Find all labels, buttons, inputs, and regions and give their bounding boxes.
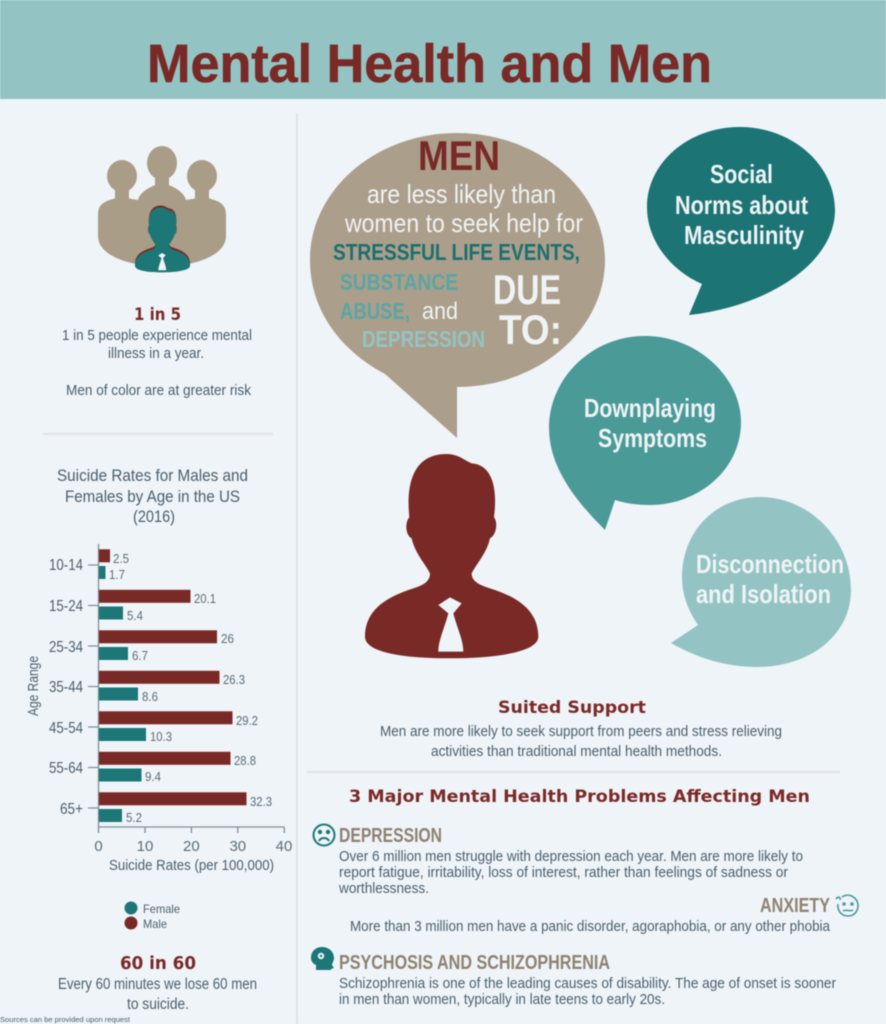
male bars: [99, 549, 246, 805]
value labels: 9.4: [145, 770, 161, 784]
text block: suited support description: activities than traditional mental health methods.: [431, 743, 722, 760]
icon: sad face: [314, 824, 334, 846]
speech bubble: social norms about masculinity: [647, 127, 835, 315]
text block: 1 in 5 description: Men of color are at greater risk: [66, 382, 251, 399]
value labels: 6.7: [132, 649, 148, 663]
value labels: 26.3: [223, 673, 245, 687]
age labels: [49, 557, 83, 818]
speech bubble: social norms about masculinity: Masculinity: [684, 220, 804, 250]
icon: anxious face: [836, 895, 858, 916]
text block: 60 in 60 description: Every 60 minutes we lose 60 men: [58, 976, 257, 993]
speech bubble: disconnection and isolation: [671, 497, 851, 667]
age labels: 45-54: [49, 720, 83, 737]
heading: psychosis and schizophrenia: PSYCHOSIS AND SCHIZOPHRENIA: [339, 952, 610, 974]
text block: depression: Over 6 million men struggle with depression each year. Men are more likely to: [339, 848, 803, 865]
text block: depression: [338, 848, 803, 897]
age labels: 65+: [60, 801, 83, 818]
header band: [0, 0, 886, 99]
panel: suited support: [380, 698, 782, 760]
value labels: 28.8: [234, 754, 256, 768]
heading: 60 in 60: 60 in 60: [120, 953, 196, 974]
axis tick labels: 40: [276, 838, 292, 855]
speech bubble: disconnection and isolation: and Isolation: [696, 579, 831, 609]
panel: psychosis and schizophrenia: [311, 947, 836, 1008]
icon: group of people with highlighted man: [98, 146, 226, 272]
axes: [88, 544, 284, 833]
bubble text: [333, 179, 583, 353]
panel: 1 in 5 statistic: [62, 146, 252, 399]
panel: suicide rates chart: [25, 466, 292, 931]
age labels: 55-64: [49, 760, 83, 777]
value labels: 32.3: [250, 795, 272, 809]
age labels: 35-44: [49, 679, 83, 696]
panel: anxiety: [350, 895, 858, 935]
text block: schizophrenia: in men than women, typically in late teens to early 20s.: [339, 991, 665, 1008]
text block: depression: worthlessness.: [338, 880, 429, 897]
bubble text: and: [422, 298, 458, 325]
x axis title: Suicide Rates (per 100,000): [109, 857, 274, 874]
age labels: 15-24: [49, 598, 83, 615]
bar chart: [25, 544, 292, 874]
text block: depression: report fatigue, irritability, loss of interest, rather than feelings of sadness or: [339, 864, 788, 881]
value labels: 29.2: [236, 714, 258, 728]
speech bubble: downplaying symptoms: Symptoms: [598, 423, 707, 453]
text block: 1 in 5 description: 1 in 5 people experience mental: [62, 327, 252, 344]
chart title: Females by Age in the US: [65, 487, 240, 506]
text block: 1 in 5 description: [62, 327, 252, 399]
chart title: [57, 466, 248, 526]
title: Mental Health and Men: [147, 34, 712, 94]
value labels: 5.2: [126, 811, 142, 825]
bubble text: women to seek help for: [344, 208, 583, 238]
y axis title: Age Range: [25, 656, 42, 716]
bubble text: SUBSTANCE: [340, 269, 458, 295]
bubble text: DUE: [493, 266, 561, 313]
text block: 60 in 60 description: to suicide.: [127, 996, 189, 1013]
speech bubble: downplaying symptoms: Downplaying: [584, 393, 716, 423]
heading: suited support: Suited Support: [498, 698, 646, 718]
icon: large man silhouette with tie: [365, 454, 538, 658]
bubble text: are less likely than: [367, 179, 556, 209]
text block: 1 in 5 description: illness in a year.: [108, 345, 204, 362]
source note: Sources can be provided upon request: [0, 1015, 131, 1024]
value labels: 10.3: [150, 730, 172, 744]
heading: depression: DEPRESSION: [339, 825, 442, 847]
bubble text: ABUSE,: [340, 298, 410, 324]
axis tick labels: 10: [137, 838, 153, 855]
panel: depression: [314, 824, 803, 897]
legend: Female: [143, 902, 180, 916]
text block: schizophrenia: Schizophrenia is one of the leading causes of disability. The age of onset is sooner: [339, 975, 836, 992]
chart title: (2016): [133, 507, 175, 526]
axis tick labels: 20: [183, 838, 200, 855]
value labels: 26: [221, 632, 234, 646]
text block: suited support description: Men are more likely to seek support from peers and stress relieving: [380, 723, 782, 740]
legend: Male: [143, 917, 167, 931]
value labels: [109, 552, 272, 825]
speech bubble: men are less likely: [310, 132, 605, 438]
bubble heading: MEN: MEN: [418, 132, 500, 179]
heading: 1 in 5: 1 in 5: [134, 305, 181, 325]
axis tick labels: [94, 838, 292, 855]
heading: 3 major mental health problems: 3 Major Mental Health Problems Affecting Men: [349, 787, 810, 807]
bubble text: DEPRESSION: [362, 326, 485, 352]
axis tick labels: 0: [94, 838, 103, 855]
age labels: 25-34: [49, 639, 83, 656]
text block: 60 in 60 description: [58, 976, 257, 1013]
speech bubble: social norms about masculinity: Social: [710, 159, 773, 189]
value labels: 5.4: [127, 609, 143, 623]
icon: head with gear: [311, 947, 334, 970]
speech bubble: disconnection and isolation: Disconnection: [696, 549, 844, 579]
text block: schizophrenia: [339, 975, 836, 1008]
value labels: 1.7: [109, 568, 125, 582]
value labels: 2.5: [113, 552, 129, 566]
panel: 60 in 60 statistic: [58, 953, 257, 1013]
bubble text: TO:: [499, 306, 562, 353]
legend: [124, 902, 180, 931]
heading: anxiety: ANXIETY: [760, 895, 831, 917]
speech bubble: downplaying symptoms: [549, 336, 741, 530]
age labels: 10-14: [49, 557, 83, 574]
text block: suited support description: [380, 723, 782, 760]
value labels: 8.6: [142, 690, 158, 704]
bubble text: STRESSFUL LIFE EVENTS,: [333, 239, 580, 265]
value labels: 20.1: [194, 592, 216, 606]
chart title: Suicide Rates for Males and: [57, 466, 248, 485]
speech bubble: social norms about masculinity: Norms about: [675, 190, 808, 220]
text block: anxiety: More than 3 million men have a panic disorder, agoraphobia, or any other phobia: [350, 918, 831, 935]
female bars: [99, 566, 146, 822]
axis tick labels: 30: [229, 838, 246, 855]
